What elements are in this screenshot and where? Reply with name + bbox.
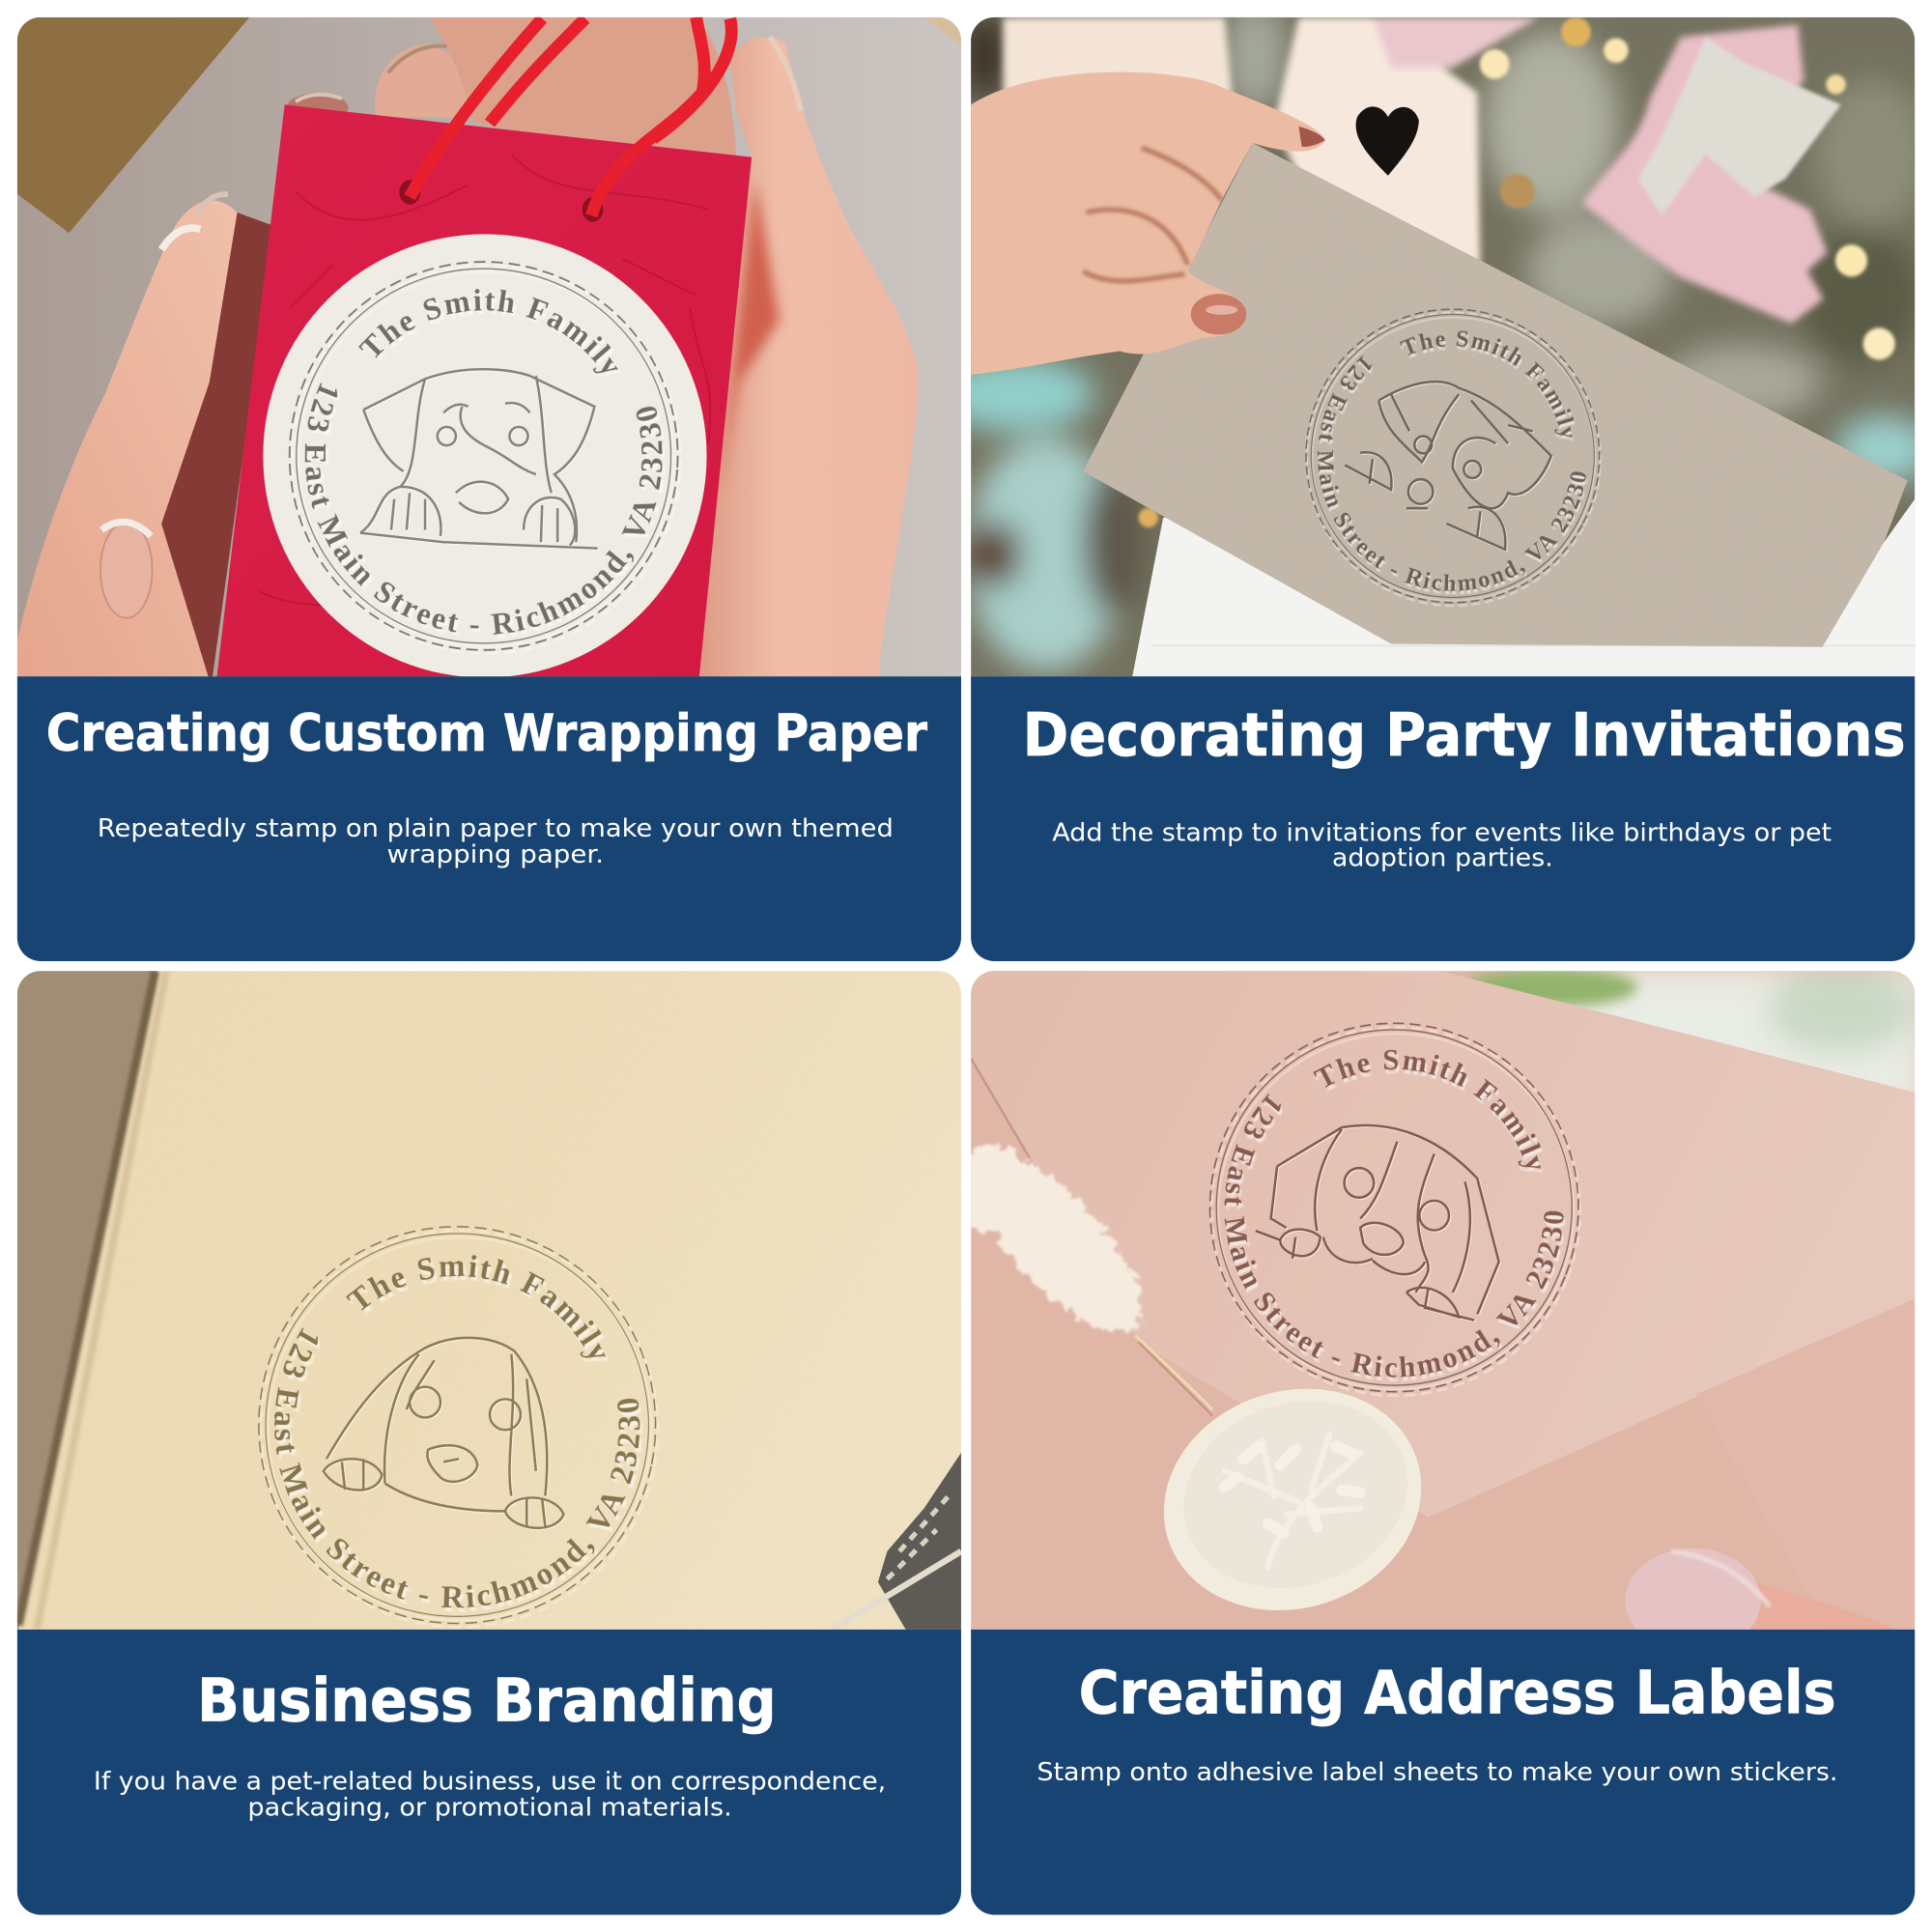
body text <box>98 814 894 869</box>
emboss stamp <box>276 249 691 663</box>
wax seal <box>1135 1356 1450 1643</box>
emboss stamp: 123 East Main Street - Richmond, VA 23230 <box>1164 1083 1581 1437</box>
heading: Business Branding <box>197 1666 777 1735</box>
body text <box>94 1768 886 1823</box>
envelope <box>1132 499 1915 676</box>
emboss stamp: The Smith Family <box>337 1224 632 1373</box>
emboss stamp: The Smith Family <box>358 289 620 377</box>
emboss stamp: The Smith Family <box>1301 1006 1577 1184</box>
right hand <box>699 37 919 676</box>
body text: Add the stamp to invitations for events like birthdays or pet <box>1052 819 1832 848</box>
fairy lights <box>1139 17 1895 527</box>
kraft card <box>1083 143 1908 647</box>
heading: Creating Address Labels <box>1079 1660 1836 1728</box>
left hand <box>17 201 239 676</box>
photo: aged paper with stamp <box>17 971 961 1661</box>
panel: address labels <box>948 966 1927 1915</box>
body text <box>1052 819 1832 873</box>
envelope flap <box>971 971 1915 1518</box>
dog line art <box>1345 382 1551 550</box>
emboss stamp <box>1255 258 1651 654</box>
photo: hand and card over envelope <box>935 0 1932 676</box>
emboss stamp <box>222 1190 693 1661</box>
dried grass plume <box>950 1129 1168 1357</box>
panel: custom wrapping paper <box>17 17 961 961</box>
heart cutout <box>1356 106 1419 176</box>
photo: pink envelope with wax seal <box>948 966 1927 1653</box>
caption bar <box>971 676 1915 961</box>
card grain <box>1083 143 1908 647</box>
body text: packaging, or promotional materials. <box>247 1794 732 1823</box>
body text: Repeatedly stamp on plain paper to make your own themed <box>98 814 894 843</box>
body text: wrapping paper. <box>387 840 604 869</box>
dog line art <box>324 1338 564 1528</box>
body text: adoption parties. <box>1332 844 1553 873</box>
caption bar <box>17 1630 961 1915</box>
white fringe <box>1637 37 1841 215</box>
red tag <box>217 104 752 676</box>
emboss stamp: 123 East Main Street - Richmond, VA 23230 <box>305 383 665 638</box>
cords <box>410 17 731 215</box>
dog line art <box>360 369 598 549</box>
hand <box>971 72 1325 375</box>
body text: Stamp onto adhesive label sheets to make your own stickers. <box>1037 1758 1837 1787</box>
emboss stamp: The Smith Family <box>1400 330 1575 440</box>
white disc <box>263 234 707 678</box>
heading: Creating Custom Wrapping Paper <box>46 704 927 763</box>
emboss stamp <box>1154 968 1634 1447</box>
caption bar <box>971 1630 1915 1915</box>
dog line art <box>1256 1125 1499 1321</box>
panel: party invitations <box>935 0 1932 961</box>
emboss stamp: 123 East Main Street - Richmond, VA 23230 <box>231 1319 658 1651</box>
fingernail <box>1736 1582 1896 1630</box>
top fingers <box>375 44 469 117</box>
tag leather creases <box>259 154 710 629</box>
background foliage <box>1520 966 1927 1114</box>
feather quill <box>878 1453 961 1630</box>
caption bar <box>17 676 961 961</box>
photo: hands holding red gift tag <box>17 17 961 676</box>
panel: business branding <box>17 971 961 1915</box>
body text: If you have a pet-related business, use it on correspondence, <box>94 1768 886 1797</box>
emboss stamp: 123 East Main Street - Richmond, VA 23230 <box>1263 346 1601 646</box>
